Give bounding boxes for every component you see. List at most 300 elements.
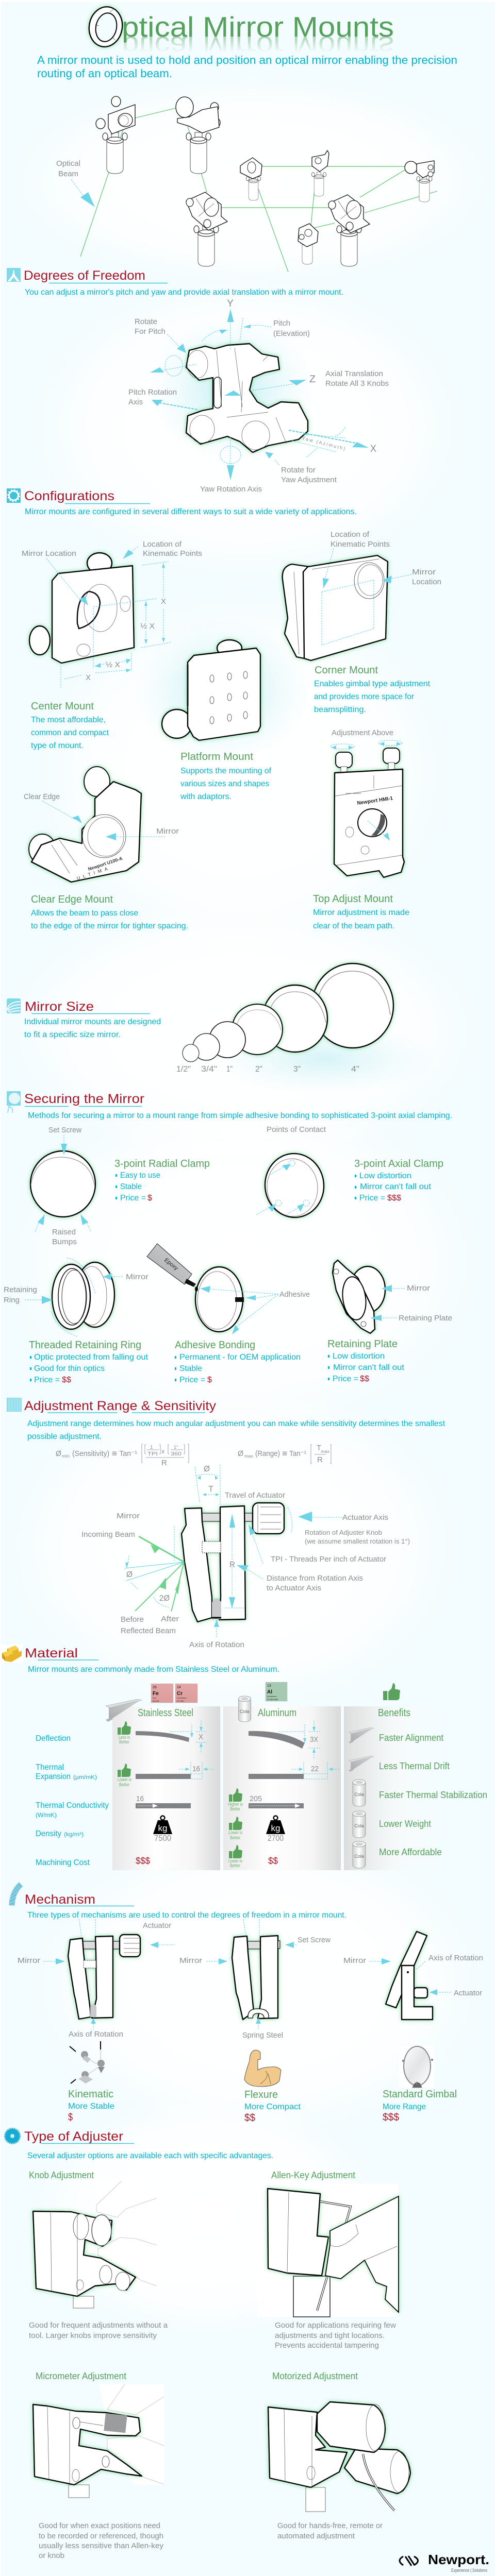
icon: aluminium element tile: 26.9815386 [267, 1698, 278, 1701]
flexure labels: Set Screw [298, 1936, 331, 1944]
corner mount caption: Corner Mount [315, 665, 378, 676]
benefits list: More Affordable [379, 1847, 442, 1857]
panel: stainless steel column: Stainless Steel [138, 1707, 193, 1719]
text: securing description: Methods for securing a mirror to a mount range from simple adhesive bonding to sophisticated 3-point axial clamping. [28, 1111, 452, 1120]
size labels: 4" [351, 1065, 359, 1074]
formula: sensitivity: TPI [147, 1451, 158, 1457]
corner mount caption: and provides more space for [314, 692, 415, 701]
panel: retaining plate [327, 1260, 452, 1383]
knob adjustment illustration [33, 2180, 157, 2308]
dimension labels: ½ X [106, 660, 120, 669]
chart: thermal expansion aluminum: 22 [311, 1765, 319, 1773]
heading: mirror size: Mirror Size [25, 999, 94, 1014]
title [86, 4, 394, 62]
adhesive caption: $ [207, 1376, 212, 1384]
diagram labels: Before [121, 1615, 144, 1624]
axial clamp caption: Mirror can't fall out [360, 1182, 432, 1191]
formula: range: max [244, 1454, 253, 1459]
motorized text: Good for hands-free, remote or [277, 2521, 383, 2530]
flexure labels [179, 1936, 331, 2040]
corner mount labels: Mirror [412, 568, 436, 577]
icon: chromium element tile: 24 [177, 1686, 181, 1689]
panel: allen-key adjustment [257, 2170, 399, 2350]
text: mirror size description [24, 1018, 161, 1039]
flexure labels: Mirror [179, 1956, 202, 1965]
top adjust mount caption: Mirror adjustment is made [313, 908, 409, 917]
chart: deflection aluminum [249, 1721, 320, 1759]
diagram labels: Ø [126, 1570, 133, 1579]
top adjust mount caption: Top Adjust Mount [313, 893, 393, 905]
chart: thermal conductivity aluminum: 205 [250, 1794, 262, 1803]
chart: deflection steel: X [199, 1733, 203, 1741]
labels: Rotate [135, 317, 157, 326]
icon: cola can [238, 1696, 251, 1722]
dimension labels [22, 540, 202, 682]
diagram labels: Rotation of Adjuster Knob [305, 1529, 382, 1536]
chart: mirror sizes [176, 963, 393, 1074]
allen-key text: adjustments and tight locations. [275, 2331, 385, 2340]
dimension labels: Kinematic Points [143, 549, 202, 558]
epoxy tube: Epoxy [163, 1257, 179, 1272]
icon: title mirror ring [86, 4, 125, 49]
text: adjustment description: Adjustment range determines how much angular adjustment you can make while sensitivity determines the smallest [27, 1419, 446, 1428]
clear edge mount illustration [29, 767, 141, 882]
icon: kinematic balls [70, 2041, 105, 2083]
dimension labels: X [86, 673, 91, 682]
dimension labels: ½ X [140, 622, 155, 631]
radial clamp caption: $ [147, 1194, 152, 1202]
micrometer text: to be recorded or referenced, though [39, 2532, 163, 2540]
icon: cola can: Cola [240, 1709, 249, 1714]
clear edge mount caption: Clear Edge Mount [31, 894, 113, 905]
epoxy tube [147, 1244, 196, 1287]
micrometer illustration [33, 2384, 164, 2498]
threaded ring caption: $$ [62, 1376, 71, 1384]
formula: sensitivity: x [161, 1448, 164, 1455]
benefits list: Cola [354, 1823, 364, 1828]
panel: motorized adjustment [268, 2371, 410, 2540]
platform mount caption [180, 751, 272, 801]
micrometer text [39, 2521, 163, 2560]
benefits list [349, 1727, 487, 1868]
chart: deflection steel: Better [119, 1739, 129, 1744]
panel: allen-key adjustment: Allen-Key Adjustment [271, 2170, 355, 2180]
radial clamp caption: Price = [120, 1194, 146, 1202]
radial clamp caption: Easy to use [120, 1171, 160, 1180]
panel: benefits column [344, 1706, 442, 1870]
benefits list: Lower Weight [379, 1819, 431, 1829]
optical beam lines [80, 107, 437, 272]
formula: sensitivity: R [161, 1459, 167, 1467]
dimension labels: X [161, 597, 166, 606]
radial clamp caption [114, 1158, 210, 1202]
retaining plate arrows [370, 1285, 405, 1321]
icon: iron element tile: Iron [153, 1697, 156, 1699]
heading: mechanism [12, 1884, 134, 1907]
retaining plate labels: Mirror [407, 1284, 430, 1293]
knob adjustment text [29, 2321, 168, 2340]
icon: standing mirror [399, 2046, 434, 2088]
panel: center mount [22, 540, 202, 750]
mount F [186, 192, 227, 266]
allen-key text: Prevents accidental tampering [275, 2341, 379, 2350]
top adjust mount illustration [334, 748, 404, 877]
diagram labels: to Actuator Axis [267, 1584, 321, 1592]
row labels [36, 1734, 109, 1867]
center mount caption: common and compact [31, 728, 109, 737]
retaining plate illustration [333, 1260, 385, 1333]
panel: 3-point radial clamp [30, 1126, 210, 1246]
panel: gimbal mechanism [343, 1931, 483, 2123]
axial clamp label: Points of Contact [267, 1125, 326, 1134]
diagram labels: Travel of Actuator [225, 1491, 285, 1500]
center mount caption: type of mount. [31, 741, 84, 750]
chart: thermal expansion steel: Better [119, 1782, 129, 1787]
axial clamp caption: Low distortion [359, 1172, 411, 1180]
kinematic labels: Axis of Rotation [69, 2030, 123, 2039]
chart: thermal conductivity aluminum: Better [230, 1806, 240, 1811]
heading: configurations: Configurations [24, 489, 114, 503]
retaining plate labels: Retaining Plate [399, 1314, 452, 1323]
corner mount labels [331, 530, 441, 586]
kinematic arrows [43, 1919, 175, 2030]
allen-key text: Good for applications requiring few [275, 2321, 396, 2330]
chart: thermal conductivity aluminum: Higher is [228, 1802, 243, 1807]
platform mount caption: various sizes and shapes [180, 779, 269, 788]
knob adjustment text: tool. Larger knobs improve sensitivity [29, 2331, 157, 2340]
chart: density steel [153, 1816, 172, 1843]
chart: optical beam path across mounts [56, 96, 437, 272]
clear edge mount caption [31, 894, 188, 930]
retaining plate caption: Mirror can't fall out [333, 1363, 405, 1372]
chart: thermal expansion steel: Lower is [118, 1777, 131, 1782]
mount A [96, 96, 135, 174]
platform mount illustration [162, 640, 260, 740]
chart: thermal expansion steel [118, 1762, 214, 1787]
benefits list: Cola [354, 1792, 364, 1797]
formula: range: max [321, 1449, 329, 1454]
intro text: A mirror mount is used to hold and position an optical mirror enabling the precision [37, 54, 457, 66]
chart: machining cost: $$ [268, 1856, 278, 1866]
threaded ring illustration [52, 1262, 114, 1329]
diagram labels: Incoming Beam [81, 1530, 135, 1539]
size labels [176, 1065, 359, 1074]
diagram labels: T [208, 1485, 213, 1494]
heading: configurations [7, 488, 150, 504]
panel: threaded retaining ring [4, 1258, 148, 1384]
icon: chromium element tile: Chromium [177, 1697, 187, 1699]
allen-key text [275, 2321, 396, 2350]
micrometer text: Good for when exact positions need [39, 2521, 160, 2530]
center mount caption: The most affordable, [31, 716, 106, 724]
retaining plate caption: Low distortion [333, 1352, 385, 1361]
labels: X [370, 444, 376, 454]
knob adjustment text: Good for frequent adjustments without a [29, 2321, 168, 2330]
threaded ring caption: Price = [34, 1376, 60, 1384]
heading: mirror size [7, 998, 150, 1014]
row labels: Thermal [36, 1763, 64, 1772]
kinematic labels [18, 1921, 171, 2039]
printed model text: Newport U100-A [88, 856, 123, 872]
top adjust mount caption [313, 893, 409, 930]
panel: benefits column: Benefits [378, 1707, 410, 1719]
center mount caption [31, 701, 109, 750]
radial clamp labels: Raised [52, 1228, 76, 1236]
formula: range: T [317, 1444, 321, 1452]
text: adjustment description [27, 1419, 446, 1441]
mount E [405, 161, 434, 202]
flexure labels: Spring Steel [242, 2031, 283, 2040]
icon: iron element tile [151, 1684, 173, 1703]
optical beam label [56, 159, 95, 207]
row labels: (W/mK) [36, 1811, 57, 1819]
icon: steel i-beam [106, 1699, 142, 1722]
row labels: Deflection [36, 1734, 71, 1743]
corner mount labels: Location [412, 578, 441, 586]
platform mount caption: Supports the mounting of [180, 767, 272, 775]
center mount illustration [29, 553, 134, 663]
icon: flexed arm [244, 2050, 281, 2087]
diagram labels: Reflected Beam [121, 1626, 176, 1635]
panel: corner mount [283, 530, 441, 714]
flexure illustration [232, 1936, 280, 2020]
adhesive caption: Stable [179, 1364, 202, 1373]
panel: 3-point axial clamp [256, 1125, 443, 1220]
gimbal caption: Standard Gimbal [383, 2089, 457, 2100]
icon: aluminium element tile: Aluminium [267, 1695, 277, 1698]
heading: adjustment range and sensitivity: Adjustment Range & Sensitivity [24, 1399, 217, 1413]
heading: type of adjuster: Type of Adjuster [24, 2129, 123, 2144]
icon: aluminium element tile: Al [267, 1689, 272, 1695]
motorized text: automated adjustment [277, 2532, 355, 2540]
formula: range: R [317, 1455, 323, 1464]
radial clamp labels [48, 1126, 81, 1246]
icon: gold bars [0, 1645, 23, 1663]
mount illustration [186, 344, 308, 452]
gimbal arrows [369, 1958, 451, 1995]
size labels: 1" [226, 1065, 233, 1074]
icon: blue knob [5, 2128, 20, 2144]
icon: benefits thumb [383, 1683, 400, 1700]
axial clamp caption [354, 1158, 443, 1202]
icon: spring [12, 1884, 21, 1905]
flexure caption: $$ [244, 2112, 255, 2124]
flexure caption: Flexure [244, 2089, 278, 2100]
gimbal caption: $$$ [383, 2112, 399, 2123]
top adjust mount caption: clear of the beam path. [313, 922, 394, 930]
printed model text [76, 856, 123, 881]
text: configurations description: Mirror mounts are configured in several different ways to suit a wide variety of applications. [25, 507, 357, 516]
chart: density steel: kg [158, 1823, 167, 1833]
panel: adhesive bonding [147, 1244, 310, 1384]
retaining plate caption: $$ [360, 1375, 369, 1383]
corner mount illustration [283, 555, 388, 660]
formula: range: (Range) ≅ Tan⁻¹ [255, 1449, 306, 1458]
clear edge mount caption: Allows the beam to pass close [31, 909, 138, 918]
formula: sensitivity: 360 [171, 1451, 182, 1457]
chart: density aluminum: Better [230, 1835, 240, 1840]
retaining plate caption: Price = [333, 1375, 358, 1383]
labels: Axial Translation [325, 369, 383, 378]
panel: aluminum column: Aluminum [258, 1707, 296, 1719]
adhesive arrows [200, 1286, 278, 1334]
heading: type of adjuster [5, 2128, 134, 2144]
adhesive caption: Price = [179, 1376, 205, 1384]
labels: Yaw Rotation Axis [200, 485, 262, 494]
heading: securing the mirror [7, 1091, 144, 1113]
dimension labels: Location of [143, 540, 182, 549]
optical beam label: Optical [56, 159, 80, 168]
adhesive mirror illustration [195, 1267, 244, 1332]
labels: Rotate All 3 Knobs [325, 379, 389, 388]
row labels: Thermal Conductivity [36, 1801, 109, 1810]
labels: Rotate for [281, 466, 316, 474]
formula: sensitivity: Ø [56, 1449, 61, 1458]
corner mount guides [322, 549, 411, 645]
icon: iron element tile: 26 [153, 1686, 157, 1689]
benefits list: Faster Alignment [379, 1733, 443, 1743]
panel: micrometer adjustment: Micrometer Adjustment [36, 2371, 126, 2381]
logo: newport [400, 2552, 489, 2573]
icon: chromium element tile: 51.9961 [177, 1700, 185, 1702]
icon: aluminium element tile [266, 1682, 287, 1701]
row labels: Density [36, 1829, 61, 1838]
chart: machining cost: $$$ [136, 1856, 150, 1866]
icon: figure holding mirror [7, 1091, 21, 1113]
top adjust mount label: Adjustment Above [332, 728, 393, 737]
chart: density aluminum: Lower is [228, 1830, 242, 1835]
adhesive caption: Permanent - for OEM application [179, 1353, 301, 1362]
diagram labels: R [229, 1561, 235, 1569]
micrometer text: or knob [39, 2551, 64, 2560]
diagram labels: Ø [204, 1465, 210, 1473]
labels: For Pitch [135, 327, 166, 336]
heading: degrees of freedom: Degrees of Freedom [24, 268, 145, 283]
labels: Yaw (Azimuth) [302, 435, 345, 451]
formula: range [238, 1444, 331, 1464]
gimbal illustration [386, 1931, 433, 2020]
contact points [256, 1160, 309, 1215]
chart: thermal conductivity steel: 16 [136, 1794, 144, 1803]
chart: degrees of freedom diagram [128, 298, 389, 494]
corner mount labels: Location of [331, 530, 370, 539]
chart: deflection aluminum: 3X [310, 1735, 318, 1744]
size labels: 2" [255, 1065, 262, 1074]
formula: sensitivity: min [62, 1454, 70, 1459]
clear edge mount labels [24, 792, 179, 836]
labels: Pitch [273, 319, 290, 328]
heading: degrees of freedom [7, 268, 168, 283]
kinematic illustration [68, 1935, 140, 2019]
gimbal labels: Axis of Rotation [428, 1954, 483, 1962]
labels: Y [227, 298, 234, 309]
title: ptical Mirror Mounts [122, 30, 394, 62]
kinematic caption: More Stable [68, 2102, 114, 2111]
mount D [311, 150, 329, 196]
gimbal labels [343, 1954, 483, 1997]
printed model text: Newport HMI-1 [357, 795, 393, 806]
diagram labels: TPI - Threads Per inch of Actuator [271, 1555, 386, 1564]
threaded ring caption [29, 1340, 148, 1384]
icon: iron element tile: 55.845 [153, 1700, 159, 1702]
platform mount caption: Platform Mount [180, 751, 253, 762]
icon: gear [7, 488, 21, 503]
panel: knob adjustment [29, 2170, 168, 2340]
corner mount caption [314, 665, 431, 714]
text: degrees of freedom description: You can adjust a mirror's pitch and yaw and provide axial translation with a mirror mount. [25, 288, 343, 297]
text: mirror size description: Individual mirror mounts are designed [24, 1018, 161, 1026]
corner mount caption: Enables gimbal type adjustment [314, 680, 431, 688]
axis arrows [150, 309, 369, 480]
dimension arrows [125, 1465, 342, 1637]
size labels: 1/2" [176, 1065, 191, 1074]
threaded ring labels: Ring [4, 1296, 20, 1304]
mirrors [183, 963, 393, 1062]
flexure arrows [206, 1919, 296, 2030]
row labels: Machining Cost [36, 1858, 90, 1867]
threaded ring caption: Optic protected from falling out [34, 1353, 148, 1362]
radial clamp illustration [30, 1151, 95, 1217]
diagram labels: Mirror [117, 1512, 140, 1520]
gimbal caption [383, 2089, 457, 2123]
threaded ring arrows [25, 1258, 123, 1336]
labels: (Elevation) [273, 329, 310, 338]
clear edge mount caption: to the edge of the mirror for tighter spacing. [31, 922, 188, 930]
intro text [37, 54, 457, 80]
flexure caption: More Compact [244, 2103, 301, 2111]
allen-key illustration [257, 2183, 399, 2317]
chart: density aluminum: kg [271, 1823, 280, 1833]
axial clamp caption: Price = [359, 1194, 385, 1202]
radial clamp labels: Bumps [52, 1238, 77, 1246]
dimension lines [46, 547, 171, 688]
heading: securing the mirror: Securing the Mirror [24, 1092, 144, 1106]
formula: sensitivity: 1° [174, 1445, 178, 1450]
mechanism illustration [182, 1503, 284, 1622]
panel: motorized adjustment: Motorized Adjustment [272, 2371, 358, 2381]
labels: Pitch Rotation [128, 388, 177, 397]
optical beam label: Beam [58, 170, 78, 178]
dimension labels: Mirror Location [22, 549, 76, 558]
radial clamp caption: 3-point Radial Clamp [114, 1158, 210, 1170]
panel: kinematic mechanism [18, 1919, 175, 2123]
row labels: (kg/m³) [64, 1832, 84, 1838]
center mount caption: Center Mount [31, 701, 94, 712]
clear edge mount labels: Clear Edge [24, 792, 60, 801]
diagram labels: Distance from Rotation Axis [267, 1574, 363, 1583]
threaded ring caption: Threaded Retaining Ring [29, 1340, 141, 1351]
corner mount labels: Kinematic Points [331, 540, 390, 549]
formula: sensitivity [56, 1444, 189, 1467]
chart: density aluminum [228, 1816, 285, 1843]
platform mount caption: with adaptors. [180, 792, 232, 801]
threaded ring caption: Good for thin optics [34, 1364, 105, 1373]
text: adjuster description: Several adjuster options are available each with specific advantages. [27, 2151, 273, 2160]
icon: newport mark [400, 2556, 418, 2566]
text: material description: Mirror mounts are commonly made from Stainless Steel or Aluminum. [28, 1665, 279, 1674]
intro text: routing of an optical beam. [37, 67, 172, 80]
gimbal caption: More Range [383, 2103, 426, 2111]
motorized text [277, 2521, 383, 2540]
axial clamp illustration [262, 1151, 326, 1220]
icon: aluminium element tile: 13 [267, 1684, 271, 1688]
panel: aluminum column [223, 1706, 341, 1870]
kinematic caption [68, 2089, 114, 2123]
formula: range: Ø [238, 1449, 243, 1458]
icon: chromium element tile [175, 1684, 197, 1703]
chart: thermal conductivity aluminum [228, 1788, 304, 1811]
text: mirror size description: to fit a specific size mirror. [24, 1030, 121, 1039]
